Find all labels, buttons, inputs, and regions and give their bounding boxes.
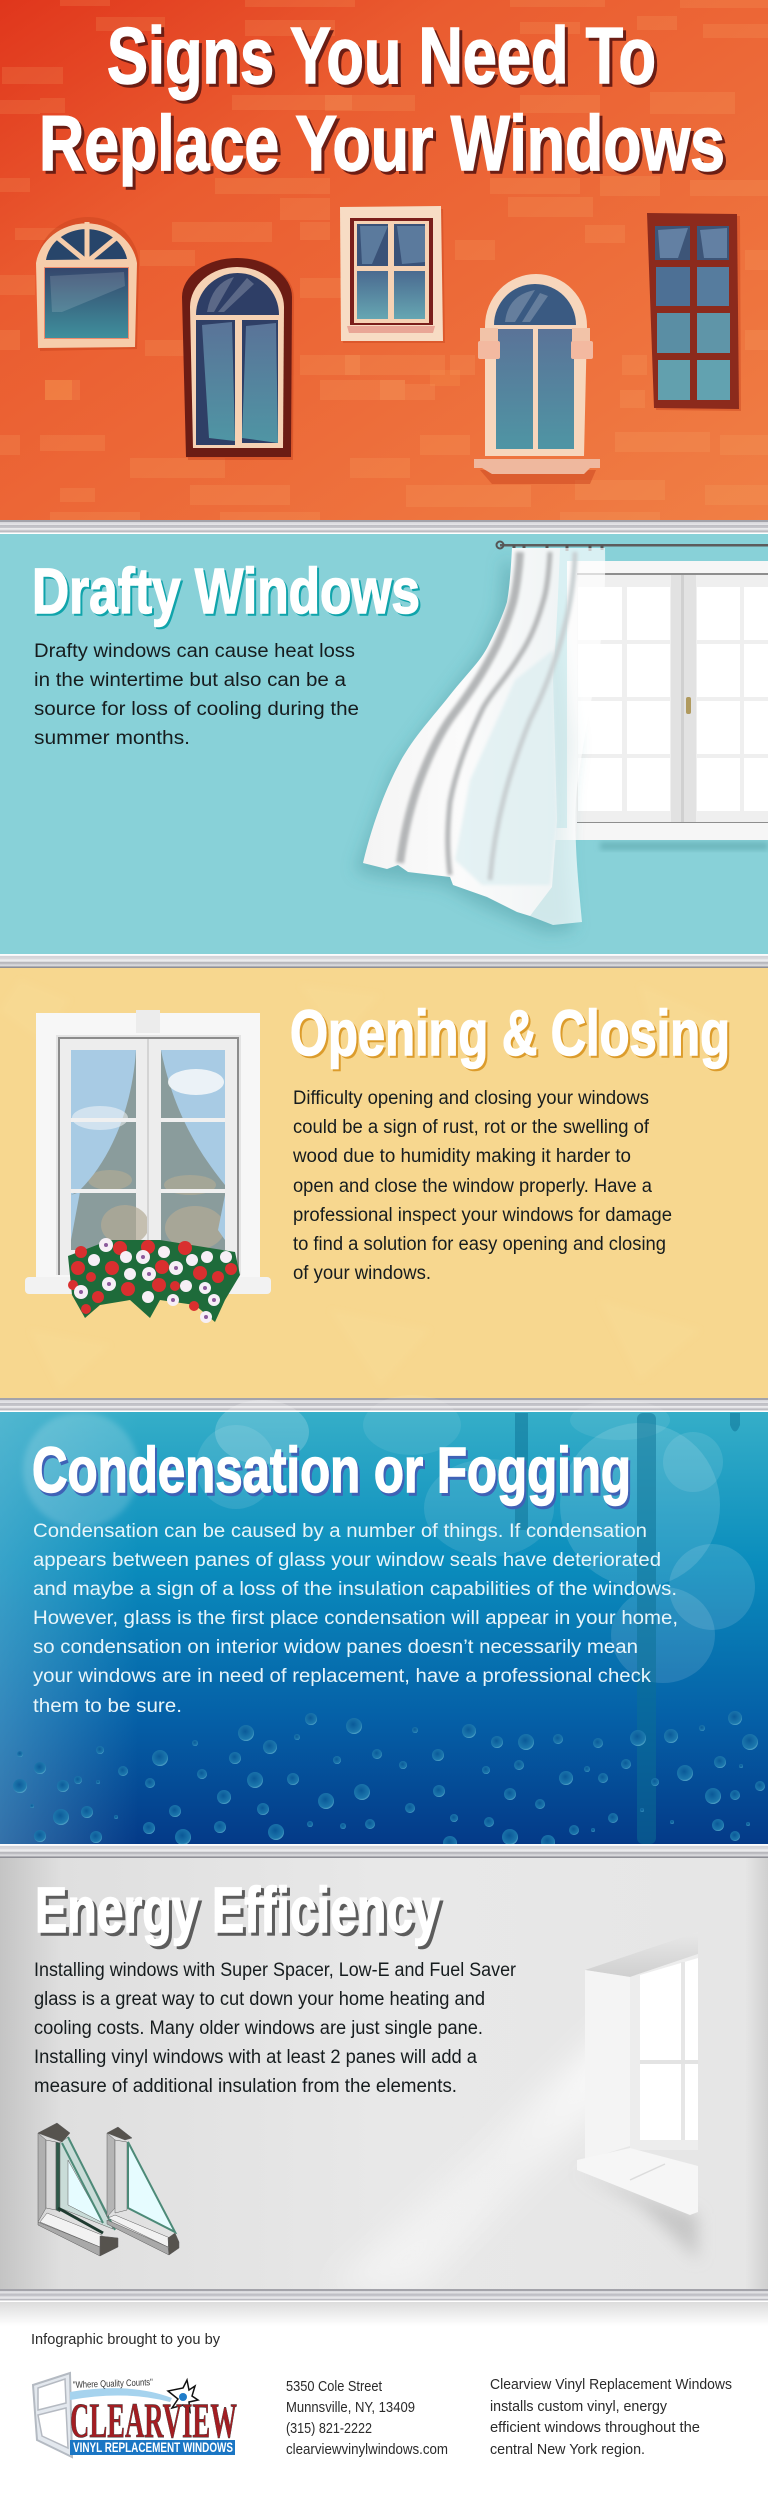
molding <box>0 1398 768 1412</box>
heading: Drafty Windows <box>32 555 420 627</box>
body text: in the wintertime but also can be a <box>34 670 346 691</box>
company description: central New York region. <box>490 2442 645 2458</box>
sheer right panel <box>530 548 605 925</box>
window box flowers <box>68 1238 240 1323</box>
body text: of your windows. <box>293 1263 431 1284</box>
brick texture <box>0 0 768 520</box>
body text: cooling costs. Many older windows are just single pane. <box>34 2018 483 2039</box>
tinted sheer band <box>455 650 557 885</box>
logo: CLEARVIEW <box>70 2392 237 2448</box>
title <box>39 11 725 187</box>
window <box>25 1010 271 1294</box>
company description: installs custom vinyl, energy <box>490 2399 668 2415</box>
body text: open and close the window properly. Have a <box>293 1176 652 1197</box>
curtain folds <box>400 552 575 880</box>
panel: energy efficiency <box>0 1858 768 2289</box>
body text: your windows are in need of replacement, have a professional check <box>33 1666 652 1687</box>
body text: Installing vinyl windows with at least 2 panes will add a <box>34 2047 477 2068</box>
double frame section <box>107 2127 179 2255</box>
wall texture <box>0 980 720 1390</box>
molding <box>0 520 768 534</box>
body text <box>34 641 359 749</box>
body text: Difficulty opening and closing your windows <box>293 1088 649 1109</box>
body text: could be a sign of rust, rot or the swelling of <box>293 1117 650 1138</box>
window 3: cream framed square <box>340 206 445 343</box>
window 1: fan arched <box>36 217 139 351</box>
body text: so condensation on interior widow panes doesn’t necessarily mean <box>33 1637 638 1658</box>
window 4: arched with corbels <box>474 274 600 484</box>
body text: summer months. <box>34 728 190 749</box>
contact details <box>286 2379 448 2458</box>
logo: VINYL REPLACEMENT WINDOWS <box>73 2440 233 2455</box>
contact details: 5350 Cole Street <box>286 2379 382 2395</box>
contact details: (315) 821-2222 <box>286 2421 372 2437</box>
water drops <box>13 1711 765 1850</box>
contact details: Munnsville, NY, 13409 <box>286 2400 415 2416</box>
body text: glass is a great way to cut down your home heating and <box>34 1989 485 2010</box>
panel: opening and closing <box>0 968 768 1398</box>
contact details: clearviewvinylwindows.com <box>286 2442 448 2458</box>
footer intro: Infographic brought to you by <box>31 2332 221 2348</box>
body text: them to be sure. <box>33 1696 182 1717</box>
body text: measure of additional insulation from the elements. <box>34 2076 457 2097</box>
body text <box>33 1521 678 1717</box>
window 5: dark red multi-pane <box>647 213 741 411</box>
opaque main panel <box>363 548 560 916</box>
panel: drafty windows <box>0 534 768 954</box>
body text: and maybe a sign of a loss of the insulation capabilities of the windows. <box>33 1579 677 1600</box>
heading: Energy Efficiency <box>35 1874 440 1946</box>
company description <box>490 2377 732 2458</box>
footer <box>0 2302 768 2509</box>
sky and curtains <box>71 1050 225 1250</box>
body text: wood due to humidity making it harder to <box>292 1146 631 1167</box>
body text: Drafty windows can cause heat loss <box>34 641 355 662</box>
molding <box>0 2289 768 2302</box>
molding <box>0 1844 768 1858</box>
light beam <box>330 2000 640 2289</box>
body text: Condensation can be caused by a number of things. If condensation <box>33 1521 647 1542</box>
double pane icon <box>38 2123 179 2256</box>
logo: "Where Quality Counts" <box>73 2377 153 2391</box>
body text: Installing windows with Super Spacer, Low-E and Fuel Saver <box>34 1960 517 1981</box>
panel: hero brick wall <box>0 0 768 520</box>
body text: source for loss of cooling during the <box>34 699 359 720</box>
company description: Clearview Vinyl Replacement Windows <box>490 2377 732 2393</box>
bokeh and streaks <box>23 1395 755 1683</box>
window frame <box>532 561 768 850</box>
body text: to find a solution for easy opening and closing <box>293 1234 666 1255</box>
window recess <box>577 1932 698 2260</box>
body text <box>292 1088 672 1284</box>
body text: However, glass is the first place condensation will appear in your home, <box>33 1608 678 1629</box>
company description: efficient windows throughout the <box>490 2420 700 2436</box>
body text: professional inspect your windows for damage <box>293 1205 672 1226</box>
body text <box>34 1960 517 2097</box>
body text: appears between panes of glass your window seals have deteriorated <box>33 1550 661 1571</box>
panel: condensation or fogging <box>0 1395 768 1850</box>
curtain rod <box>496 542 768 551</box>
window 2: dark arched <box>182 258 294 460</box>
molding <box>0 954 768 968</box>
logo <box>33 2373 237 2457</box>
triple frame section <box>38 2123 118 2256</box>
curtain <box>355 548 605 933</box>
